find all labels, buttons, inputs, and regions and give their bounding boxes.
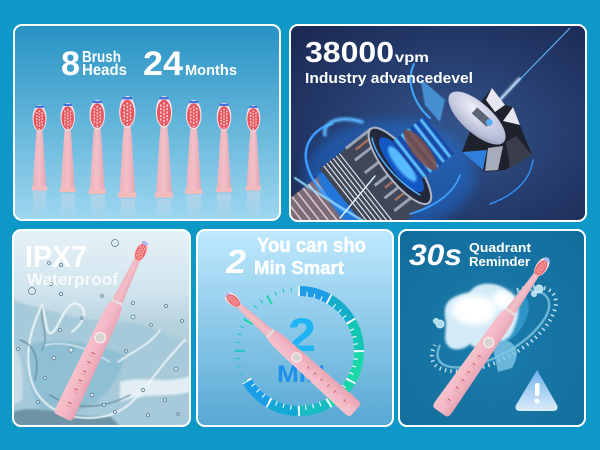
heading: 8 brush heads, 24 months: Brush (82, 49, 121, 66)
text: 30s: 30s (409, 239, 462, 272)
panel: brush heads (14, 25, 280, 220)
heading: 8 brush heads, 24 months (61, 45, 237, 83)
panel: motor (289, 24, 587, 222)
icon: warning triangle (516, 370, 558, 411)
heading: 8 brush heads, 24 months: 24 (143, 45, 183, 83)
text: 38000 vpm: 38000 (305, 37, 394, 69)
icon: tooth ring (432, 287, 556, 372)
brush heads row (32, 96, 261, 198)
heading: 8 brush heads, 24 months: Heads (82, 62, 127, 79)
water droplets (16, 240, 184, 416)
icon: fan blades (462, 88, 532, 172)
icon: fan disc (448, 92, 506, 144)
heading: 8 brush heads, 24 months: 8 (61, 45, 80, 83)
panel: 2 min smart timer (197, 230, 393, 426)
text: IPX7: IPX7 (25, 239, 87, 274)
text: gauge 2 MIN: MIN (277, 361, 325, 388)
text: 38000 vpm: vpm (395, 49, 429, 65)
icon: pink toothbrush (432, 252, 556, 418)
text: 2: 2 (225, 243, 247, 280)
icon: motor body (291, 116, 454, 220)
panel: quadrant reminder (399, 230, 585, 426)
text: industry level: Industry advancedevel (305, 70, 473, 87)
text: waterproof: Waterproof (27, 270, 118, 289)
icon: pink toothbrush (219, 286, 362, 417)
text: min smart: Min Smart (254, 258, 344, 278)
icon: pink toothbrush (53, 237, 155, 422)
heading: 8 brush heads, 24 months: Months (185, 62, 237, 79)
icon: blue swirl arcs (295, 64, 533, 222)
motor glow (305, 120, 475, 230)
text: you can sho: You can sho (257, 235, 366, 257)
text: 38000 vpm (305, 37, 429, 69)
water surface (13, 300, 190, 426)
text: reminder: Reminder (469, 254, 530, 269)
chart: timer gauge (235, 286, 364, 416)
light streak (500, 28, 570, 100)
text: quadrant: Quadrant (469, 240, 532, 255)
icon: bubbles (434, 285, 543, 328)
brush head reflections (33, 191, 260, 214)
water splash (20, 303, 185, 418)
icon: tooth (445, 284, 519, 349)
panel: waterproof (13, 230, 190, 426)
text: gauge 2 MIN: 2 (288, 308, 316, 361)
text: gauge 2 MIN (277, 308, 325, 388)
